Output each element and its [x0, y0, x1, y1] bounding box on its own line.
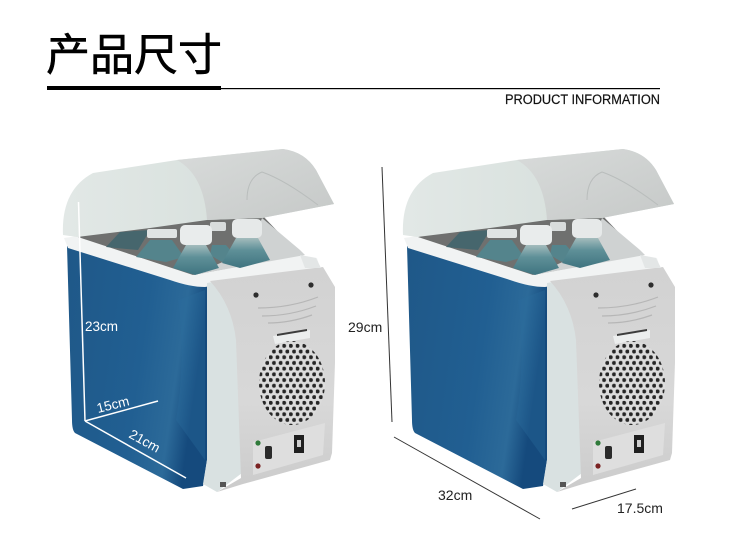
label: height 23cm: 23cm: [85, 319, 118, 334]
dimension lines: right cooler: [382, 167, 636, 519]
header rule: [47, 86, 660, 90]
title: 产品尺寸: [46, 19, 222, 83]
label: length 32cm: 32cm: [438, 487, 472, 503]
label: width 21cm: 21cm: [127, 427, 163, 456]
subtitle: PRODUCT INFORMATION: [505, 92, 660, 107]
product photo: cooler, right: [403, 149, 675, 492]
label: depth 15cm: 15cm: [95, 393, 131, 416]
dimension lines: left cooler: [78, 202, 186, 478]
product photo: cooler, left: [63, 149, 335, 492]
label: depth 17.5cm: 17.5cm: [617, 500, 663, 516]
label: height 29cm: 29cm: [348, 319, 382, 335]
